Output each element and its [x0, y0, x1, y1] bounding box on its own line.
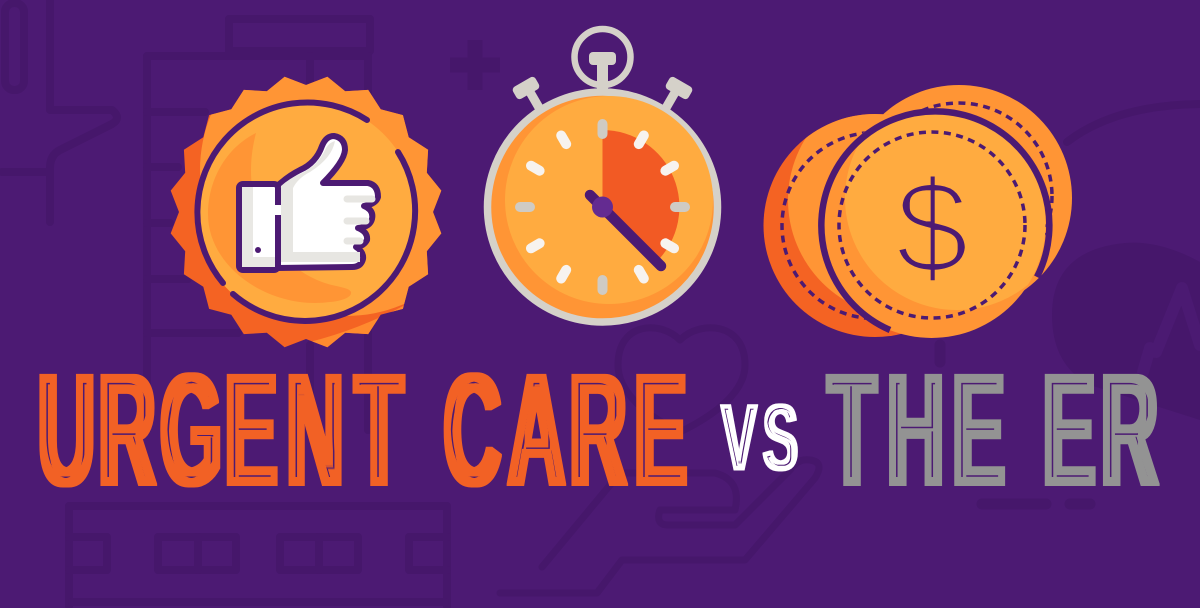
stopwatch crown — [574, 29, 630, 90]
back coin right — [846, 85, 1072, 311]
tick marks — [520, 124, 685, 290]
badge disc — [196, 102, 416, 322]
cuff — [239, 184, 278, 270]
badge burst — [170, 76, 442, 348]
stopwatch hand — [590, 195, 661, 266]
background: capsule and tube — [2, 0, 117, 222]
front coin — [818, 108, 1053, 338]
background: heart in hand — [500, 328, 819, 593]
background: arc — [1067, 104, 1200, 142]
coin ring — [821, 111, 1049, 330]
background: hospital base and windows — [69, 506, 447, 606]
title: VS: VS — [721, 385, 798, 491]
back coin left — [764, 114, 902, 337]
title: URGENT CARE: URGENT CARE — [38, 340, 687, 519]
background: dashes — [940, 345, 1090, 504]
icon: thumb hand — [239, 136, 378, 270]
background: dark heart monitor blob — [1052, 243, 1200, 420]
background: plus sign — [450, 40, 500, 90]
stopwatch pivot — [592, 196, 613, 218]
background: hospital building — [147, 19, 370, 430]
dollar sign: $ — [895, 154, 969, 302]
icon: thumbs-up badge — [170, 76, 442, 348]
badge ring — [197, 102, 415, 321]
icon: stack of coins — [764, 83, 1072, 338]
title: THE ER: THE ER — [828, 340, 1158, 519]
elapsed sector — [602, 130, 679, 261]
icon: stopwatch — [488, 29, 718, 322]
stopwatch side buttons — [511, 75, 694, 113]
coin dashed inner ring — [839, 132, 1025, 318]
stopwatch face — [488, 92, 718, 322]
